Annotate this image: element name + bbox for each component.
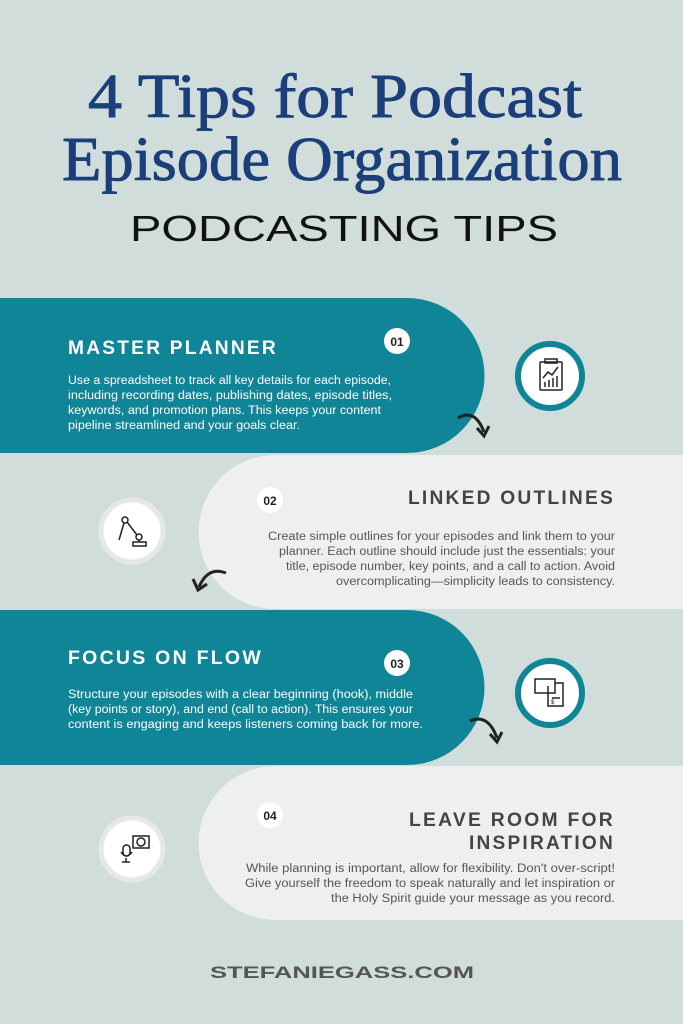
badge 03 [384, 650, 410, 676]
icon: robot arm [101, 500, 163, 562]
text: inspiration body [245, 863, 615, 905]
heading: leave room for inspiration [409, 810, 615, 854]
badge 01: 01 [390, 335, 404, 349]
badge 03: 03 [390, 657, 404, 671]
text: inspiration body: Give yourself the freedom to speak naturally and let inspiration or [245, 878, 615, 890]
icon: clipboard chart [518, 344, 582, 408]
title: 4 Tips for Podcast [88, 63, 582, 131]
title: Episode Organization [62, 126, 622, 194]
text: focus on flow body: (key points or story), and end (call to action). This ensures your [68, 704, 413, 716]
arrow 3 [470, 719, 502, 742]
icon: invoice: $ [551, 700, 555, 706]
badge 02 [257, 487, 283, 513]
panel: focus on flow [0, 610, 484, 765]
text: focus on flow body: Structure your episodes with a clear beginning (hook), middle [68, 689, 413, 701]
text: linked outlines body: overcomplicating—simplicity leads to consistency. [336, 576, 615, 588]
badge 02: 02 [263, 494, 277, 508]
panel: leave room for inspiration [198, 766, 683, 920]
badge 04 [257, 802, 283, 828]
panel: master planner [0, 298, 484, 453]
title [62, 63, 622, 194]
icon: invoice [518, 661, 582, 725]
text: inspiration body: While planning is important, allow for flexibility. Don't over-script! [246, 863, 615, 875]
text: linked outlines body: title, episode number, key points, and a call to action. Avoid [286, 561, 615, 573]
text: focus on flow body: content is engaging and keeps listeners coming back for more. [68, 719, 423, 731]
heading: leave room for inspiration: LEAVE ROOM FOR [409, 810, 615, 831]
icon: microphone money [101, 818, 163, 880]
arrow 2 [193, 571, 226, 590]
text: focus on flow body [68, 689, 423, 731]
subtitle: PODCASTING TIPS [130, 208, 558, 249]
text: master planner body [68, 375, 392, 432]
badge 01 [384, 328, 410, 354]
text: master planner body: pipeline streamlined and your goals clear. [68, 420, 300, 432]
text: master planner body: Use a spreadsheet to track all key details for each episode, [68, 375, 391, 387]
heading: master planner: MASTER PLANNER [68, 338, 278, 359]
heading: focus on flow: FOCUS ON FLOW [68, 648, 263, 669]
text: linked outlines body [268, 531, 615, 588]
text: linked outlines body: planner. Each outline should include just the essentials: your [279, 546, 615, 558]
footer: STEFANIEGASS.COM [210, 963, 474, 982]
text: master planner body: including recording dates, publishing dates, episode titles, [68, 390, 392, 402]
panel: linked outlines [198, 455, 683, 609]
badge 04: 04 [263, 809, 277, 823]
heading: linked outlines: LINKED OUTLINES [408, 488, 615, 509]
text: master planner body: keywords, and promotion plans. This keeps your content [68, 405, 382, 417]
text: inspiration body: the Holy Spirit guide your message as you record. [331, 893, 615, 905]
text: linked outlines body: Create simple outlines for your episodes and link them to your [268, 531, 615, 543]
arrow 1 [458, 415, 489, 436]
heading: leave room for inspiration: INSPIRATION [469, 833, 615, 854]
